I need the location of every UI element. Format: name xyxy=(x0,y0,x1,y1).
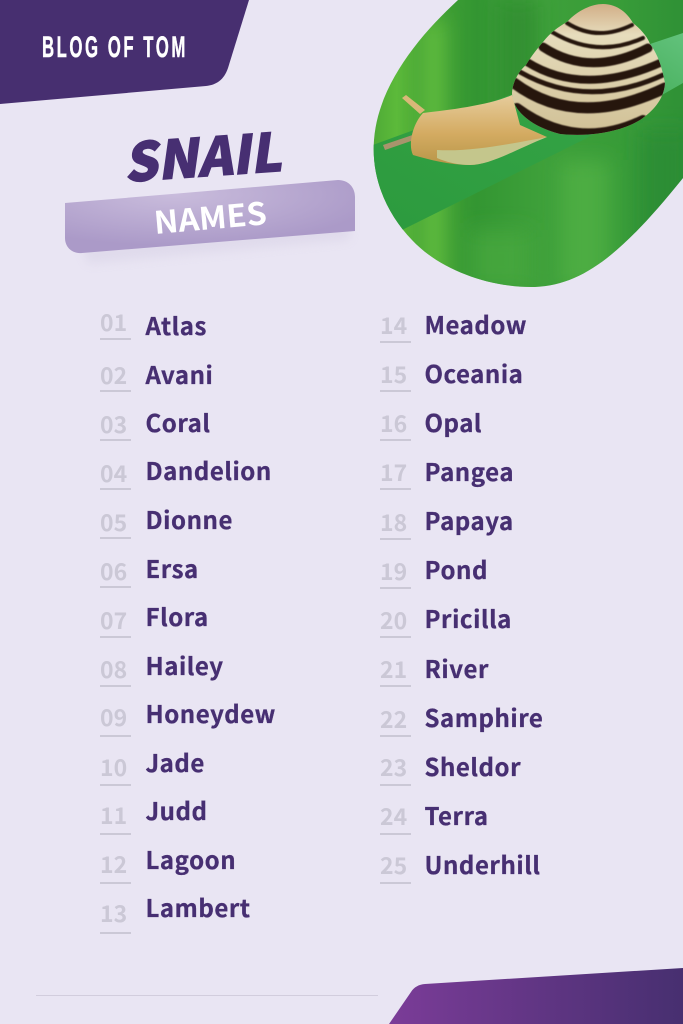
name 23: Sheldor xyxy=(424,748,521,783)
name 15 xyxy=(380,355,523,391)
subtitle word: names: NAMES xyxy=(152,188,268,243)
name 12 xyxy=(100,841,236,883)
photo: snail on a leaf xyxy=(365,0,683,300)
name 06 xyxy=(100,550,199,587)
name 04: 04 xyxy=(100,455,127,489)
name 06: Ersa xyxy=(146,550,199,585)
name 17: Pangea xyxy=(424,453,514,488)
snail body xyxy=(383,95,547,165)
name 20 xyxy=(380,600,512,637)
name 12: 12 xyxy=(100,846,127,880)
name 11: 11 xyxy=(100,797,127,831)
name 03: Coral xyxy=(146,404,210,439)
name 11: Judd xyxy=(146,792,208,827)
name 17: 17 xyxy=(380,454,407,488)
name 24: Terra xyxy=(424,797,489,832)
name 18 xyxy=(380,502,514,539)
name 11 xyxy=(100,792,208,834)
name 20: Pricilla xyxy=(424,600,512,635)
header banner xyxy=(0,0,249,104)
name 22 xyxy=(380,699,543,736)
name 19 xyxy=(380,551,488,588)
name 22: Samphire xyxy=(424,699,543,734)
name 05: Dionne xyxy=(146,501,233,536)
name 05 xyxy=(100,501,233,538)
subtitle shadow and ribbon xyxy=(65,180,355,264)
name 13: 13 xyxy=(100,895,127,929)
name 23: 23 xyxy=(380,749,407,783)
title word: snail: SNAIL xyxy=(123,110,291,198)
name 04 xyxy=(100,452,272,489)
name 16: Opal xyxy=(424,404,482,439)
name 18: Papaya xyxy=(424,502,514,537)
name 07: Flora xyxy=(146,598,209,633)
snail shell xyxy=(512,4,665,135)
name 09: 09 xyxy=(100,699,127,733)
name 16 xyxy=(380,404,482,440)
name 07: 07 xyxy=(100,602,127,636)
name 18: 18 xyxy=(380,504,407,538)
name 14: 14 xyxy=(380,307,407,341)
name 14: Meadow xyxy=(424,306,527,341)
name 02: Avani xyxy=(144,356,213,391)
name 19: 19 xyxy=(380,553,407,587)
name 21: 21 xyxy=(380,651,407,685)
name 24: 24 xyxy=(380,798,407,832)
footer banner xyxy=(389,968,683,1024)
name 10 xyxy=(100,744,205,785)
name 23 xyxy=(380,748,521,785)
name 03: 03 xyxy=(100,406,127,440)
name 09 xyxy=(100,695,276,736)
name 13 xyxy=(100,889,251,933)
name 25: Underhill xyxy=(424,846,540,881)
name 05: 05 xyxy=(100,504,127,538)
name 19: Pond xyxy=(424,551,488,586)
name 02: 02 xyxy=(100,357,127,391)
name 04: Dandelion xyxy=(146,452,272,487)
name 01: Atlas xyxy=(144,307,207,342)
name 07 xyxy=(100,598,209,637)
brand text: BLOG OF TOM xyxy=(42,31,188,64)
name 08 xyxy=(100,647,224,686)
name 01 xyxy=(100,304,207,342)
leaf blade xyxy=(370,33,683,232)
name 12: Lagoon xyxy=(146,841,236,876)
name 10: Jade xyxy=(146,744,205,779)
name 21 xyxy=(380,650,489,686)
name 06: 06 xyxy=(100,553,127,587)
name 09: Honeydew xyxy=(146,695,276,730)
name 01: 01 xyxy=(100,304,127,338)
name 17 xyxy=(380,453,514,489)
name 08: Hailey xyxy=(146,647,224,682)
names list: column one xyxy=(100,304,276,933)
name 14 xyxy=(380,306,527,342)
name 15: 15 xyxy=(380,356,407,390)
name 13: Lambert xyxy=(146,889,251,924)
title xyxy=(65,110,355,264)
name 24 xyxy=(380,797,489,834)
name 02 xyxy=(100,356,213,391)
name 22: 22 xyxy=(380,701,407,735)
name 16: 16 xyxy=(380,405,407,439)
name 15: Oceania xyxy=(424,355,523,390)
name 03 xyxy=(100,404,210,440)
name 08: 08 xyxy=(100,651,127,685)
names list: column two xyxy=(380,306,543,883)
name 20: 20 xyxy=(380,602,407,636)
name 25: 25 xyxy=(380,847,407,881)
name 10: 10 xyxy=(100,749,127,783)
name 25 xyxy=(380,846,540,883)
name 21: River xyxy=(424,650,489,685)
